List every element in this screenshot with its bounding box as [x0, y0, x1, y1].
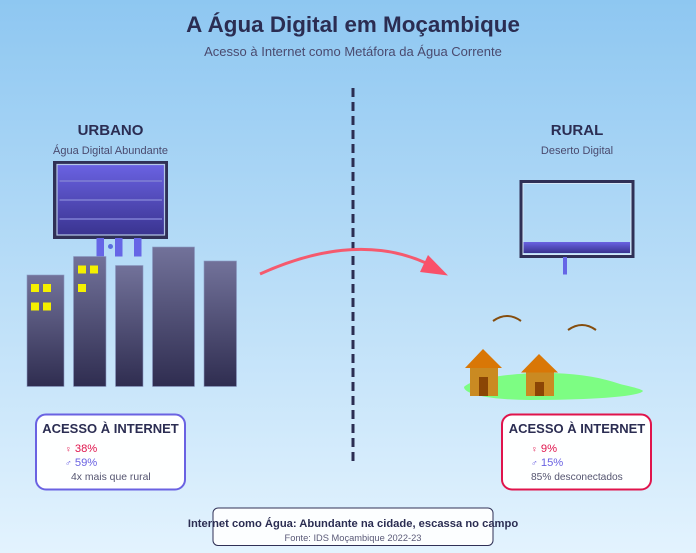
- panel: footer conclusion: [188, 508, 518, 546]
- urban female stat: ♀ 38%: [65, 443, 97, 455]
- icon: full urban water tank: [54, 162, 166, 238]
- urban male stat: ♂ 59%: [65, 457, 97, 469]
- icon: green ground patch: [464, 373, 643, 400]
- urban heading: URBANO: [78, 122, 144, 139]
- source note: Fonte: IDS Moçambique 2022-23: [285, 533, 421, 543]
- icon: rural pipe: [563, 257, 567, 274]
- icon: house left: [465, 349, 502, 396]
- rural disconnected note: 85% desconectados: [531, 472, 623, 483]
- urban subheading: Água Digital Abundante: [53, 144, 168, 157]
- icon: urban pipes: [96, 238, 142, 256]
- icon: dry cracks: [493, 316, 596, 330]
- subtitle: Acesso à Internet como Metáfora da Água Corrente: [204, 44, 502, 59]
- footer message: Internet como Água: Abundante na cidade, escassa no campo: [188, 517, 518, 530]
- title: A Água Digital em Moçambique: [186, 12, 520, 37]
- rural subheading: Deserto Digital: [541, 145, 613, 157]
- arrow: urban to rural: [260, 249, 448, 276]
- rural panel heading: ACESSO À INTERNET: [509, 421, 645, 436]
- panel: rural stats: [502, 414, 651, 490]
- rural female stat: ♀ 9%: [531, 443, 557, 455]
- panel: urban stats: [36, 414, 185, 490]
- rural male stat: ♂ 15%: [531, 457, 563, 469]
- icon: house right: [521, 354, 558, 396]
- icon: city buildings: [27, 247, 236, 386]
- urban panel heading: ACESSO À INTERNET: [42, 421, 179, 436]
- rural heading: RURAL: [551, 122, 603, 139]
- icon: nearly empty rural water tank: [521, 182, 633, 256]
- urban comparison note: 4x mais que rural: [71, 472, 151, 483]
- central dashed divider: [352, 88, 354, 462]
